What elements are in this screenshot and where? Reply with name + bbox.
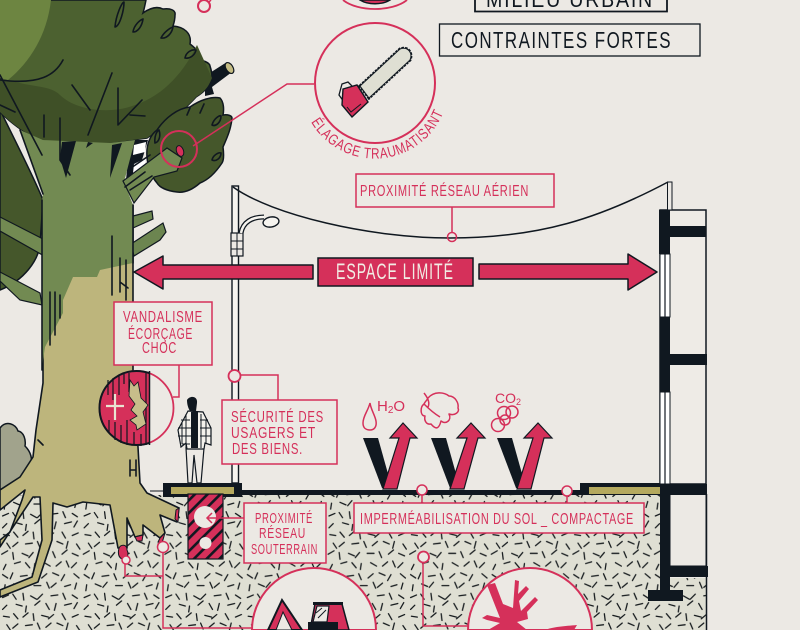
icon: leaf [421, 393, 458, 428]
cut pruned stump [175, 145, 185, 157]
tree [0, 0, 236, 597]
callout circle: dying tree [468, 568, 592, 630]
soil ground section [0, 495, 706, 630]
label: élagage traumatisant [311, 105, 446, 159]
exchange arrow: water [363, 423, 417, 489]
top cut-off circle [343, 0, 407, 9]
small right stubs [131, 211, 166, 256]
icon: water droplet H2O: H [377, 398, 388, 415]
crown curl marks [115, 2, 196, 58]
pruned branch foliage [147, 97, 232, 192]
heading: contraintes fortes [440, 24, 700, 56]
callout: overhead network proximity: PROXIMITÉ RÉSEAU AÉRIEN [360, 181, 529, 200]
callout: underground network proximity: SOUTERRAIN [251, 541, 318, 558]
arrow: limited space left [134, 256, 313, 289]
top cut-off small marker [198, 0, 211, 12]
callout: vandalism: ÉCORÇAGE [128, 324, 193, 343]
icon: carved bark magnifier [100, 371, 174, 446]
cut black branch [205, 62, 232, 96]
callout: user safety: SÉCURITÉ DES [231, 407, 324, 426]
light crown highlight [0, 0, 51, 80]
icon: chainsaw [339, 48, 411, 117]
underground network block [188, 494, 223, 559]
foliage curl marks [155, 104, 221, 161]
icon: CO2 bubbles: CO [495, 390, 516, 406]
ground surface slab [150, 483, 660, 497]
connector: roots to bottom circles [122, 542, 254, 628]
green trunk [20, 130, 135, 367]
street lamp [231, 186, 280, 483]
arrow: limited space right [479, 254, 657, 290]
callout: user safety [222, 370, 337, 464]
callout: underground network proximity: PROXIMITÉ [255, 510, 313, 527]
icon: traffic cone and digger [268, 600, 349, 630]
red cut root tips [118, 508, 179, 559]
connector: sealed soil to tree decline [418, 552, 470, 626]
heading: contraintes fortes: CONTRAINTES FORTES [451, 27, 672, 53]
callout: soil sealing and compaction: IMPERMÉABILISATION DU SOL _ COMPACTAGE [360, 509, 634, 528]
callout: vandalism: CHOC [142, 340, 177, 357]
tree outlines [0, 60, 152, 476]
callout: user safety: DES BIENS. [232, 441, 303, 458]
callout circle: construction works [252, 568, 376, 630]
exchange arrow: leaf [431, 423, 485, 489]
callout: underground network proximity: RÉSEAU [259, 525, 306, 542]
lower left foliage [0, 110, 43, 290]
callout: vandalism [100, 302, 212, 446]
icon: water droplet H2O: 2 [388, 405, 394, 416]
building facade section [648, 182, 708, 630]
callout: overhead network proximity [356, 174, 554, 242]
exchange arrow: CO2 [497, 423, 552, 489]
icon: CO2 bubbles: 2 [516, 397, 521, 407]
left branches [0, 217, 46, 305]
tan trunk with roots [0, 205, 179, 597]
icon: dead red tree [482, 580, 538, 630]
label: espace limité: ESPACE LIMITÉ [336, 259, 454, 284]
callout: underground network proximity [207, 503, 326, 563]
main crown [0, 0, 212, 144]
overhead power line [233, 182, 668, 238]
sky gaps behind crown [126, 140, 148, 180]
icon: water droplet H2O [363, 398, 405, 430]
right pruned branch [123, 148, 182, 203]
icon: water droplet H2O: O [393, 398, 405, 415]
icon: CO2 bubbles [492, 390, 521, 432]
person [178, 397, 211, 483]
callout: user safety: USAGERS ET [231, 425, 316, 442]
callout: vandalism: VANDALISME [123, 309, 203, 326]
label: espace limité [318, 258, 473, 286]
callout: traumatic pruning: ÉLAGAGE TRAUMATISANT [312, 108, 442, 159]
callout: soil sealing and compaction [354, 485, 644, 533]
icon: fallen leaf [545, 625, 577, 630]
callout: traumatic pruning [160, 22, 442, 168]
bush behind roots [0, 424, 31, 492]
